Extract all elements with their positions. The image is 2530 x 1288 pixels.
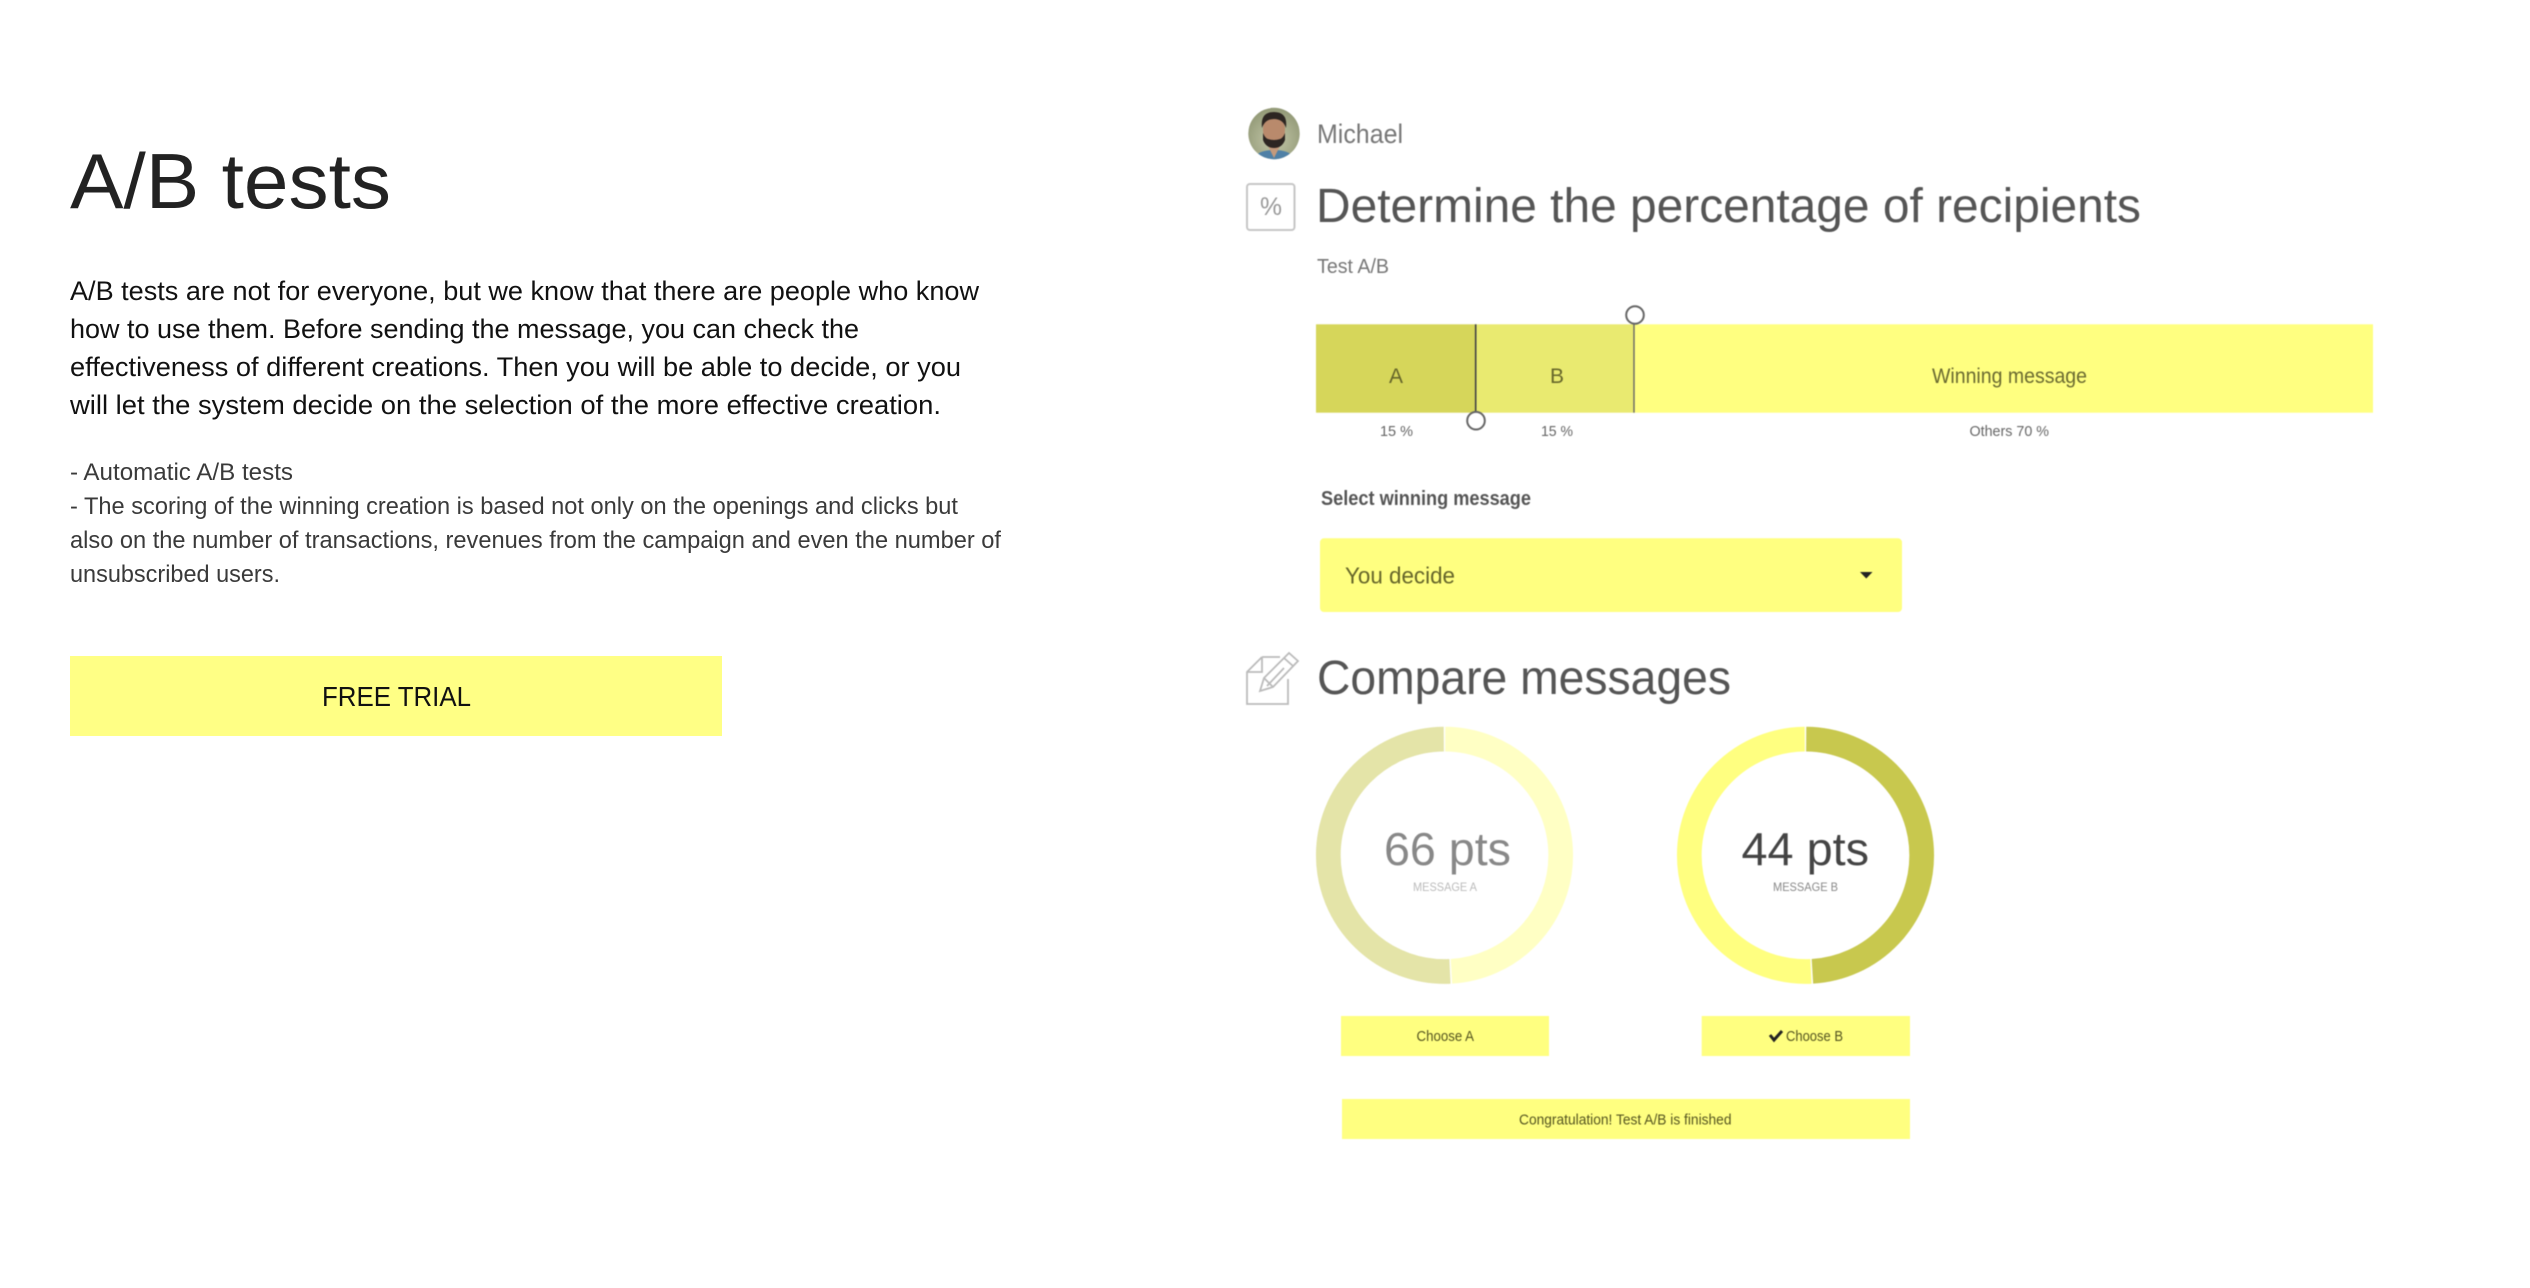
chart: message B score ring: [1689, 739, 1922, 972]
bar segment B: [1476, 324, 1634, 440]
button: choose B: [1702, 1016, 1910, 1056]
bar segment A: 15 %: [1380, 423, 1413, 440]
slider handle A/B: [1467, 324, 1485, 430]
panel: text column: [69, 137, 1001, 736]
banner: test finished: [1342, 1099, 1910, 1139]
button: choose A: [1341, 1016, 1549, 1056]
bar segment A: [1316, 324, 1476, 440]
heading: determine percentage: Determine the percentage of recipients: [1316, 180, 2141, 233]
banner: test finished: Congratulation! Test A/B is finished: [1519, 1112, 1732, 1129]
dropdown: you decide: You decide: [1345, 562, 1455, 588]
label: select winning message: Select winning message: [1321, 488, 1531, 510]
text block: feature list: - The scoring of the winning creation is based not only on the openings and clicks but: [70, 493, 958, 520]
bar segment winning message: [1634, 324, 2373, 440]
slider handle B/winner: [1626, 306, 1644, 413]
panel: application screenshot: [1246, 106, 2373, 1139]
infographic canvas: [70, 107, 2374, 1140]
caption A: MESSAGE A: [1413, 880, 1477, 894]
text block: feature list: unsubscribed users.: [70, 561, 280, 588]
icon: note with pencil: [1247, 653, 1298, 704]
icon: percent box: %: [1260, 193, 1282, 221]
caption B: MESSAGE B: [1773, 880, 1838, 894]
bar segment B: B: [1550, 365, 1564, 388]
text block: feature list: [70, 459, 1001, 588]
icon: user avatar: [1246, 106, 1302, 162]
bar segment winning message: Others 70 %: [1970, 423, 2049, 440]
label: test A/B: Test A/B: [1317, 256, 1389, 278]
chart: message A score ring: [1328, 739, 1561, 972]
user name: Michael: [1317, 119, 1403, 149]
text block: feature list: also on the number of transactions, revenues from the campaign and even the number of: [70, 527, 1001, 554]
button: free trial: [70, 656, 722, 736]
text block: introduction: how to use them. Before sending the message, you can check the: [70, 314, 859, 344]
text block: introduction: will let the system decide on the selection of the more effective creation.: [69, 390, 941, 420]
icon: check mark: [1770, 1031, 1782, 1040]
score A: 66 pts: [1384, 823, 1511, 875]
score B: 44 pts: [1742, 823, 1869, 875]
heading: compare messages: Compare messages: [1317, 652, 1731, 705]
button: free trial: FREE TRIAL: [322, 681, 471, 712]
icon: percent box: [1247, 184, 1294, 230]
button: choose A: Choose A: [1416, 1028, 1474, 1045]
title: A/B tests: [70, 137, 391, 225]
bar segment B: 15 %: [1541, 423, 1573, 440]
bar segment A: A: [1389, 365, 1403, 388]
text block: feature list: - Automatic A/B tests: [70, 459, 293, 486]
button: choose B: Choose B: [1786, 1028, 1843, 1045]
icon: dropdown caret: [1860, 572, 1872, 578]
chart: recipient split bar: [1316, 306, 2373, 440]
dropdown: you decide: [1320, 538, 1902, 612]
bar segment winning message: Winning message: [1932, 364, 2087, 388]
text block: introduction: effectiveness of different creations. Then you will be able to decide, or you: [70, 352, 961, 382]
text block: introduction: A/B tests are not for everyone, but we know that there are people who know: [70, 276, 980, 306]
text block: introduction: [69, 276, 980, 420]
